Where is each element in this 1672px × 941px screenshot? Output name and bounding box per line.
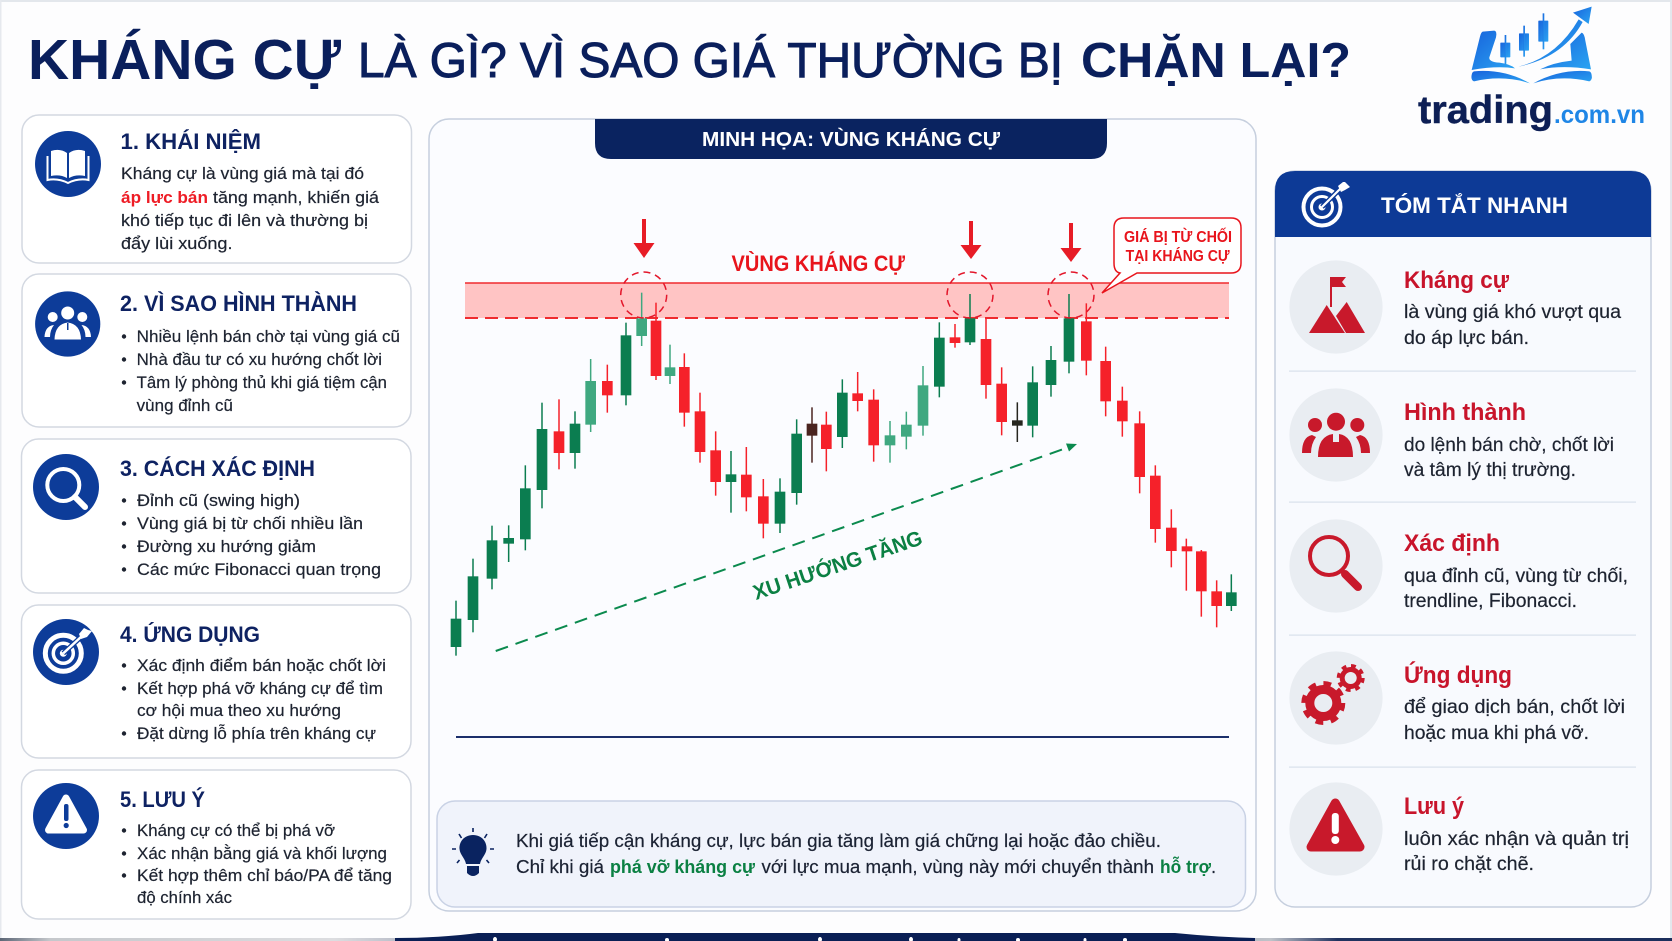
icon: magnifier: [1310, 537, 1358, 587]
panel: 5. lưu ý: [22, 770, 411, 919]
icon: gears: [1304, 666, 1363, 722]
row: lưu ý: [1289, 782, 1629, 876]
arrow: uptrend line: [496, 444, 1077, 651]
row: xác định: qua đỉnh cũ, vùng từ chối,: [1404, 566, 1628, 587]
row: hình thành: [1289, 388, 1614, 482]
panel header: TÓM TẮT NHANH: [1381, 193, 1568, 218]
row: ứng dụng: [1289, 651, 1625, 745]
label: xu hướng tăng: XU HƯỚNG TĂNG: [750, 526, 925, 605]
row: lưu ý: rủi ro chặt chẽ.: [1404, 854, 1534, 875]
text block: [516, 830, 1216, 877]
logo: trading.com.vn: [1418, 7, 1645, 132]
title: [28, 28, 1351, 92]
bullet list: [122, 492, 381, 579]
row: hình thành: và tâm lý thị trường.: [1404, 460, 1576, 481]
panel: minh họa vùng kháng cự: [429, 119, 1256, 911]
icon: people: [35, 291, 100, 357]
heading: 5. LƯU Ý: [120, 787, 205, 812]
bullet list: [122, 328, 400, 415]
bullet list: Kết hợp phá vỡ kháng cự để tìm: [137, 680, 383, 698]
bullet list: Đặt dừng lỗ phía trên kháng cự: [137, 724, 376, 743]
text block: phá vỡ kháng cự: [610, 856, 756, 877]
heading: 3. CÁCH XÁC ĐỊNH: [120, 456, 315, 481]
logo: trading.com.vn: trading: [1418, 89, 1553, 132]
heading: 1. KHÁI NIỆM: [120, 129, 261, 154]
icon: open book: [35, 131, 101, 197]
bullet list: Nhà đầu tư có xu hướng chốt lời: [137, 351, 382, 369]
text block: Khi giá tiếp cận kháng cự, lực bán gia tăng làm giá chững lại hoặc đảo chiều.: [516, 830, 1161, 851]
icon: target: [33, 619, 99, 685]
callout: giá bị từ chối: TẠI KHÁNG CỰ: [1126, 246, 1230, 265]
bullet list: Vùng giá bị từ chối nhiều lần: [137, 515, 363, 533]
bullet list: vùng đỉnh cũ: [137, 397, 233, 415]
heading: 2. VÌ SAO HÌNH THÀNH: [120, 291, 357, 316]
rejection circles: [621, 272, 1094, 318]
bullet list: Xác định điểm bán hoặc chốt lời: [137, 657, 386, 675]
callout: giá bị từ chối: GIÁ BỊ TỪ CHỐI: [1124, 226, 1232, 246]
chart header: MINH HỌA: VÙNG KHÁNG CỰ: [702, 127, 1000, 151]
bullet list: Nhiều lệnh bán chờ tại vùng giá cũ: [137, 328, 400, 346]
row: xác định: [1289, 519, 1628, 613]
text block: đẩy lùi xuống.: [121, 235, 232, 253]
title: KHÁNG CỰ: [28, 28, 342, 92]
panel: tóm tắt nhanh: [1275, 171, 1651, 907]
row: ứng dụng: để giao dịch bán, chốt lời: [1404, 697, 1625, 718]
row: lưu ý: Lưu ý: [1404, 793, 1465, 820]
row: xác định: trendline, Fibonacci.: [1404, 591, 1577, 612]
panel: 1. khái niệm: [22, 115, 412, 263]
icon: warning: [1311, 803, 1360, 847]
panel: 2. vì sao hình thành: [22, 274, 411, 427]
baseline rule: [456, 736, 1229, 738]
row: kháng cự: do áp lực bán.: [1404, 328, 1529, 349]
text block: [121, 165, 380, 253]
bullet list: [122, 657, 386, 743]
bullet list: Các mức Fibonacci quan trọng: [137, 561, 381, 579]
icon: light bulb: [452, 828, 494, 876]
icon: mountain flag: [1309, 277, 1365, 333]
icon: warning: [33, 783, 99, 849]
row: kháng cự: Kháng cự: [1404, 267, 1510, 294]
bullet list: Đường xu hướng giảm: [137, 538, 316, 556]
panel header: [1275, 171, 1651, 237]
bullet list: Tâm lý phòng thủ khi giá tiệm cận: [137, 374, 387, 392]
row: ứng dụng: hoặc mua khi phá vỡ.: [1404, 723, 1589, 744]
heading: 4. ỨNG DỤNG: [120, 622, 260, 647]
footer band: [0, 933, 1672, 941]
callout: tip box: [437, 801, 1246, 907]
logo: trading.com.vn: .com.vn: [1554, 101, 1645, 129]
bullet list: Kháng cự có thể bị phá vỡ: [137, 822, 335, 840]
row: hình thành: Hình thành: [1404, 399, 1526, 426]
row: xác định: Xác định: [1404, 530, 1500, 557]
text block: Kháng cự là vùng giá mà tại đó: [121, 165, 364, 183]
bullet list: [122, 822, 392, 907]
bullet list: Kết hợp thêm chỉ báo/PA để tăng: [137, 867, 392, 885]
bullet list: độ chính xác: [137, 889, 232, 907]
icon: people: [1302, 413, 1370, 457]
label: vùng kháng cự: VÙNG KHÁNG CỰ: [732, 251, 906, 276]
callout: giá bị từ chối: [1102, 218, 1241, 293]
text block: hỗ trợ: [1160, 856, 1212, 877]
text block: Chỉ khi giá: [516, 856, 605, 877]
bullet list: Xác nhận bằng giá và khối lượng: [137, 844, 387, 863]
resistance zone: [465, 283, 1229, 318]
bullet list: cơ hội mua theo xu hướng: [137, 702, 341, 720]
row: hình thành: do lệnh bán chờ, chốt lời: [1404, 435, 1614, 456]
panel: 4. ứng dụng: [22, 605, 411, 758]
text block: khó tiếp tục đi lên và thường bị: [121, 212, 368, 230]
chart header: [595, 119, 1107, 159]
icon: book with rising candlesticks: [1471, 7, 1592, 83]
icon: magnifier: [33, 454, 99, 520]
text block: tăng mạnh, khiến giá: [213, 189, 380, 207]
bullet list: Đỉnh cũ (swing high): [137, 492, 300, 510]
panel: 3. cách xác định: [22, 439, 411, 593]
text block: với lực mua mạnh, vùng này mới chuyển thành: [762, 856, 1154, 877]
icon: target: [1304, 182, 1350, 226]
candlestick chart: [451, 293, 1237, 656]
title: LÀ GÌ? VÌ SAO GIÁ THƯỜNG BỊ: [358, 34, 1063, 88]
row: kháng cự: là vùng giá khó vượt qua: [1404, 302, 1621, 323]
row: lưu ý: luôn xác nhận và quản trị: [1404, 829, 1629, 850]
arrows: rejection points: [634, 219, 1082, 262]
row: ứng dụng: Ứng dụng: [1404, 661, 1512, 689]
text block: áp lực bán: [121, 189, 208, 207]
text block: .: [1211, 856, 1216, 877]
title: CHẶN LẠI?: [1081, 34, 1351, 88]
row: kháng cự: [1289, 260, 1621, 354]
